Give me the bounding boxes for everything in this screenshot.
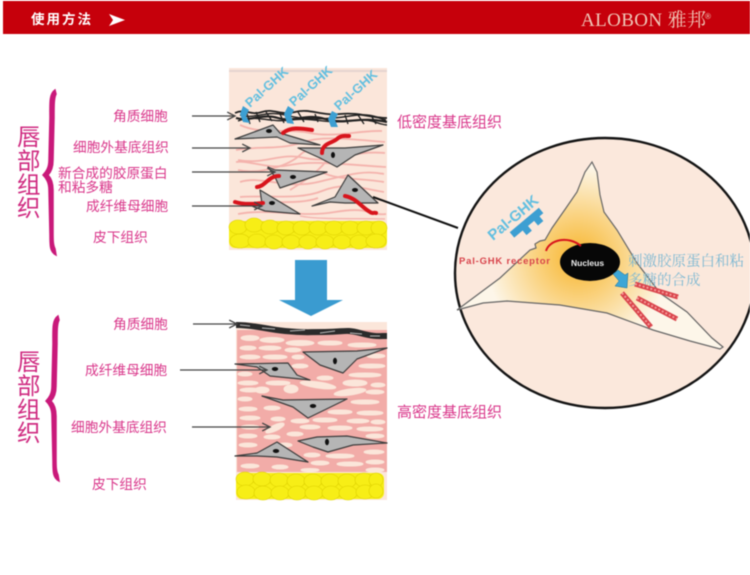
bottom left labels: 皮下组织 <box>92 477 147 492</box>
synthesis text: 多糖的合成 <box>628 269 700 290</box>
zoom connector line <box>373 197 458 228</box>
synthesis text: 刺激胶原蛋白和粘 <box>628 250 744 271</box>
registered mark: ® <box>705 12 711 21</box>
top lip tissue title: 唇 <box>17 124 40 150</box>
fibroblast cells <box>235 125 320 145</box>
top left labels: 和粘多糖 <box>58 179 113 195</box>
top left labels: 细胞外基底组织 <box>73 139 169 155</box>
big fibroblast <box>457 162 723 349</box>
bottom lip tissue title: 部 <box>17 373 40 399</box>
nucleus <box>560 243 620 281</box>
top label arrows <box>192 116 275 206</box>
nuclei <box>272 358 337 453</box>
bottom left labels <box>71 317 168 492</box>
magnified cell circle <box>455 138 750 408</box>
stratum corneum <box>235 110 387 125</box>
nucleus label: Nucleus <box>571 258 604 268</box>
Pal-GHK molecules: Pal-GHK <box>242 63 292 110</box>
top left labels <box>58 109 169 245</box>
top lip tissue title: 织 <box>17 195 40 221</box>
receptor label: Pal-GHK receptor <box>459 256 550 267</box>
stratum corneum <box>236 325 387 336</box>
top lip tissue title: 组 <box>17 172 40 198</box>
subcutaneous fat <box>229 218 387 249</box>
receptor signal arrow <box>546 240 581 251</box>
Pal-GHK molecules: Pal-GHK <box>286 62 336 109</box>
header bar <box>3 1 750 34</box>
bottom lip tissue title: 唇 <box>17 349 40 375</box>
Pal-GHK label: Pal-GHK <box>485 192 542 244</box>
collagen strands <box>622 284 678 327</box>
high density label: 高密度基底组织 <box>397 404 502 421</box>
subcutaneous fat <box>236 472 384 500</box>
Pal-GHK molecules: Pal-GHK <box>331 66 381 113</box>
bottom lip tissue title <box>17 349 40 446</box>
top left labels: 角质细胞 <box>113 109 168 124</box>
top lip brace <box>43 90 56 255</box>
bottom skin diagram <box>235 322 387 500</box>
Pal-GHK molecules <box>240 62 381 127</box>
header title: 使用方法 <box>31 11 93 27</box>
sparse fibres <box>236 125 386 219</box>
bottom left labels: 成纤维母细胞 <box>85 363 167 378</box>
bottom lip tissue title: 织 <box>17 420 40 446</box>
fibroblast cells <box>303 348 387 373</box>
header arrow icon <box>109 14 125 26</box>
synthesis text <box>628 250 744 290</box>
top lip tissue title <box>17 124 40 221</box>
bottom lip brace <box>46 316 59 481</box>
brand logo: ALOBON 雅邦 <box>581 9 706 31</box>
top left labels: 新合成的胶原蛋白 <box>58 165 168 181</box>
bottom left labels: 细胞外基底组织 <box>71 419 167 435</box>
Pal-GHK molecule <box>510 208 547 242</box>
top left labels: 成纤维母细胞 <box>86 199 168 214</box>
transition arrow <box>279 260 343 316</box>
synthesis arrow <box>613 270 628 288</box>
dense fibres <box>238 336 385 472</box>
top left labels: 皮下组织 <box>93 230 148 245</box>
low density label: 低密度基底组织 <box>397 114 502 131</box>
top skin diagram <box>229 62 387 250</box>
new collagen strands <box>235 128 376 213</box>
bottom lip tissue title: 组 <box>17 397 40 423</box>
bottom left labels: 角质细胞 <box>113 317 168 332</box>
top lip tissue title: 部 <box>17 148 40 174</box>
nuclei <box>266 129 358 205</box>
bottom label arrows <box>180 324 270 427</box>
